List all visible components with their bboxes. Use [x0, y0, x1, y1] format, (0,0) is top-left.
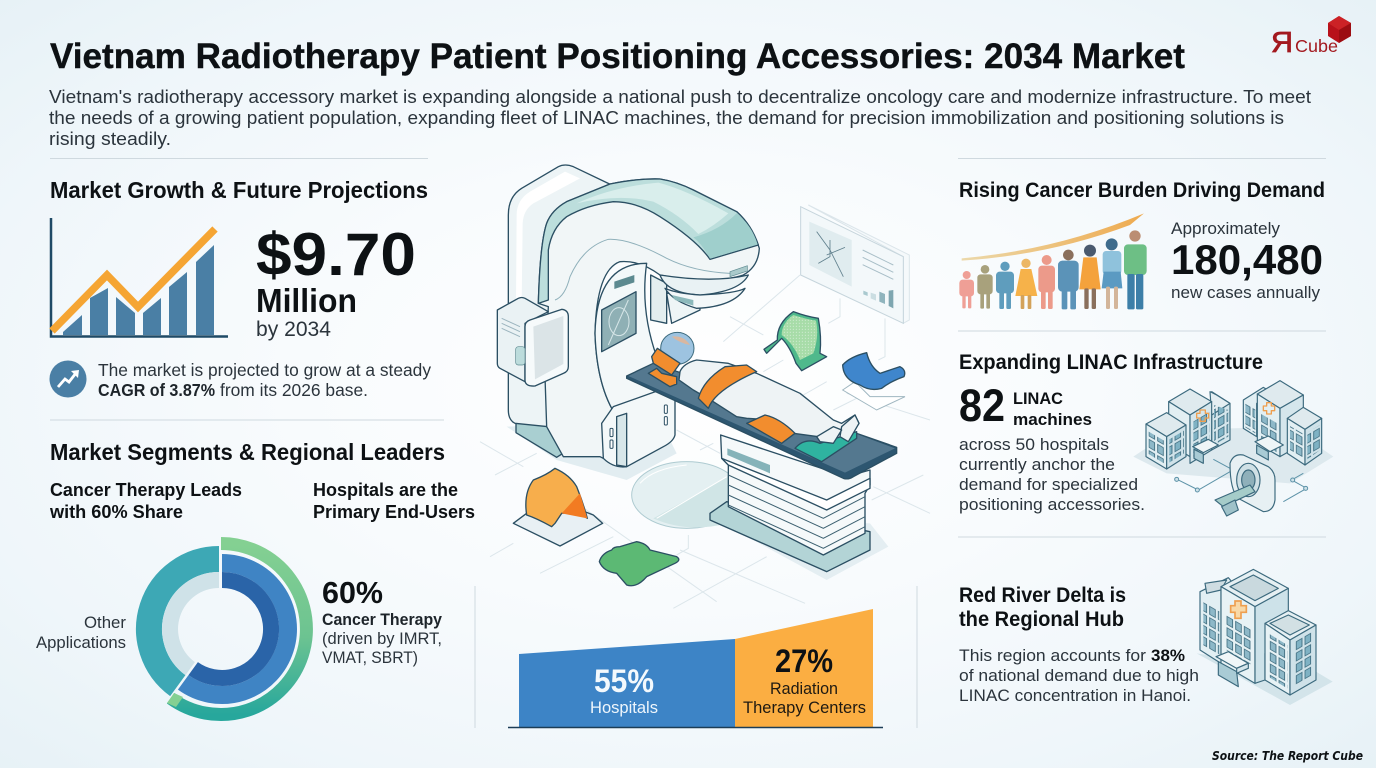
accessory: green pillow: [599, 542, 679, 586]
floor disc: [632, 462, 742, 528]
donut chart: [149, 544, 306, 714]
icon: growing people: [959, 213, 1147, 309]
stat: 82 linac machines: machines: [1013, 410, 1092, 429]
stat: 9.70 million: $9.70: [256, 221, 416, 288]
stat: 82 linac machines: LINAC: [1013, 389, 1063, 408]
icon: hospitals and scanner: [1133, 381, 1333, 516]
chart: rising bars with trend line: [51, 218, 228, 336]
gantry lower housing: [602, 390, 675, 467]
gantry column: [508, 165, 613, 427]
text: CAGR: CAGR of 3.87%: [98, 380, 215, 400]
label: other applications: Other: [84, 614, 126, 632]
stat: 180,480 new cases: 180,480: [1171, 236, 1323, 283]
intro paragraph: rising steadily.: [49, 128, 171, 149]
control box: [497, 297, 568, 386]
head tiers: [651, 266, 748, 323]
stat: 180,480 new cases: Approximately: [1171, 219, 1280, 238]
panel: rising cancer burden: [959, 178, 1325, 309]
monitor panel: [801, 205, 909, 323]
text: linac description: [959, 435, 1145, 514]
label: 60 percent cancer therapy: VMAT, SBRT): [322, 649, 418, 667]
label: hospitals: [590, 663, 658, 717]
gantry arm and ring body: [538, 179, 759, 465]
subheading: hospitals: [313, 479, 475, 522]
illustration: linac machine with patient and accessories: [480, 165, 930, 608]
label: radiation therapy centers: Therapy Centers: [743, 698, 866, 717]
text: CAGR: The market is projected to grow at a steady: [98, 360, 431, 380]
right hospital: [1243, 381, 1322, 465]
accessory: blue cushion: [843, 353, 905, 410]
label: hospitals: 55%: [594, 663, 654, 699]
panel: expanding linac infrastructure: [959, 350, 1333, 516]
text: regional share: of national demand due to high: [959, 666, 1199, 685]
label: 60 percent cancer therapy: [322, 575, 443, 667]
text: regional share: 38%: [1151, 646, 1185, 665]
heading: market growth: Market Growth & Future Projections: [50, 177, 428, 203]
stat: 82 linac machines: [959, 380, 1092, 431]
knee wedge: [747, 415, 795, 443]
accessory: green mask: [764, 312, 827, 371]
subheading: cancer therapy: Cancer Therapy Leads: [50, 479, 242, 500]
patient head and support: [648, 332, 694, 387]
floor shadow: [507, 420, 677, 480]
text: regional share: [959, 646, 1199, 705]
subheading: hospitals: Hospitals are the: [313, 479, 458, 500]
label: hospitals: Hospitals: [590, 698, 658, 717]
left hospital: [1146, 389, 1230, 469]
logo: RCube: Я: [1271, 27, 1293, 59]
text: regional share: LINAC concentration in Hanoi.: [959, 686, 1191, 705]
label: 60 percent cancer therapy: (driven by IMRT,: [322, 630, 442, 648]
accessory: orange mask: [513, 468, 603, 546]
text: linac description: positioning accessories.: [959, 495, 1145, 514]
heading: rising cancer burden: Rising Cancer Burden Driving Demand: [959, 178, 1325, 202]
ring inner face: [595, 263, 660, 417]
text: linac description: demand for specialized: [959, 475, 1138, 494]
subheading: hospitals: Primary End-Users: [313, 501, 475, 522]
text: linac description: across 50 hospitals: [959, 435, 1109, 454]
logo: RCube: Cube: [1295, 36, 1338, 56]
text: linac description: currently anchor the: [959, 455, 1115, 474]
foot cushion: [795, 432, 857, 462]
text: CAGR: [98, 360, 431, 400]
intro paragraph: the needs of a growing patient population, expanding fleet of LINAC machines, the demand for precision immobilization and positioning solutions is: [49, 107, 1284, 128]
stat: 9.70 million: Million: [256, 282, 357, 319]
heading: red river delta: [959, 583, 1126, 631]
panel: market segments: [36, 439, 475, 714]
text: regional share: This region accounts for: [959, 646, 1146, 665]
couch pedestal: [710, 435, 870, 572]
heading: red river delta: Red River Delta is: [959, 583, 1126, 607]
heading: expanding linac: Expanding LINAC Infrastructure: [959, 350, 1263, 374]
label: 60 percent cancer therapy: Cancer Therapy: [322, 611, 443, 629]
gantry arm teal band: [538, 179, 758, 303]
machine base: [516, 413, 568, 457]
stat: 82 linac machines: 82: [959, 380, 1005, 431]
label: other applications: [36, 614, 126, 652]
panel: market growth: [50, 177, 431, 400]
panel: red river delta: [959, 569, 1333, 705]
gantry display: [602, 275, 636, 352]
label: radiation therapy centers: Radiation: [770, 679, 838, 698]
icon: growth arrow: [50, 360, 86, 398]
label: other applications: Applications: [36, 634, 126, 652]
header: [49, 37, 1311, 149]
label: 60 percent cancer therapy: 60%: [322, 575, 383, 610]
logo: RCube: [1271, 16, 1351, 59]
patient body: [679, 360, 859, 442]
label: radiation therapy centers: [743, 643, 866, 717]
feet: [817, 415, 859, 443]
stat: 180,480 new cases: [1171, 219, 1323, 302]
strap: [698, 365, 757, 408]
title: Vietnam Radiotherapy Patient Positioning Accessories: 2034 Market: [50, 37, 1185, 76]
intro paragraph: [49, 86, 1311, 149]
treatment couch: [627, 363, 897, 479]
intro paragraph: Vietnam's radiotherapy accessory market is expanding alongside a national push to decentralize oncology care and modernize infrastructure. To meet: [49, 86, 1311, 107]
stat: 180,480 new cases: new cases annually: [1171, 283, 1320, 302]
scanner: [1215, 455, 1275, 516]
icon: hospital: [1197, 569, 1333, 705]
heading: market segments: Market Segments & Regional Leaders: [50, 439, 445, 465]
stat: 9.70 million: [256, 221, 416, 341]
heading: red river delta: the Regional Hub: [959, 607, 1124, 631]
stat: 9.70 million: by 2034: [256, 318, 331, 341]
text: CAGR: from its 2026 base.: [220, 380, 368, 400]
chart: end-user share bars: [508, 609, 883, 728]
label: radiation therapy centers: 27%: [775, 643, 833, 679]
subheading: cancer therapy: [49, 479, 242, 522]
subheading: cancer therapy: with 60% Share: [49, 501, 183, 522]
